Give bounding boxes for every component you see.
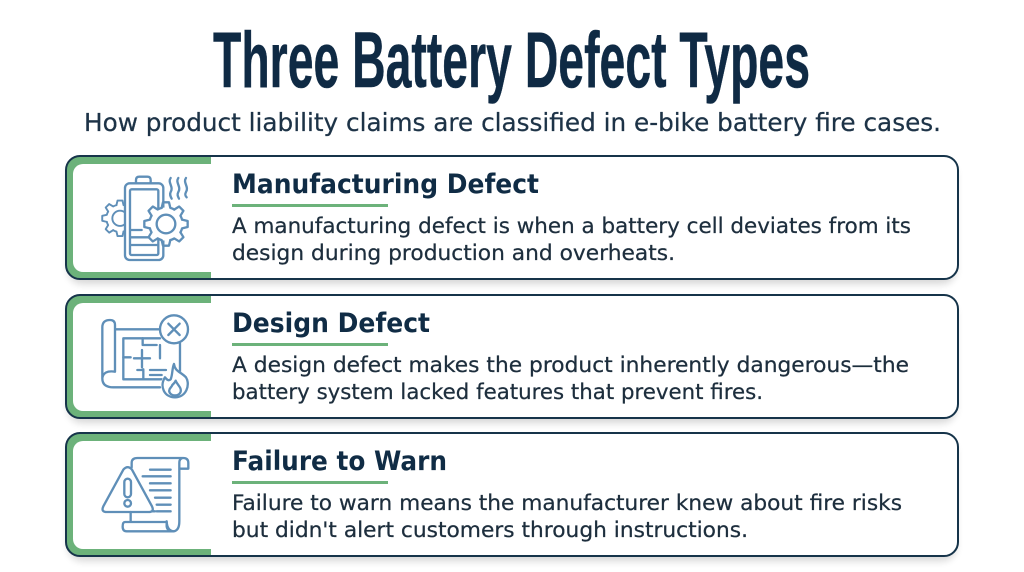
heading underline: [232, 343, 388, 346]
description: battery system lacked features that prevent fires.: [232, 380, 763, 405]
heading: Failure to Warn: [232, 446, 447, 477]
icon: warning triangle with document: [103, 458, 188, 531]
icon: blueprint with x mark and flame: [102, 315, 189, 398]
description: A manufacturing defect is when a battery cell deviates from its: [232, 214, 911, 239]
panel: manufacturing defect: [66, 156, 958, 284]
subtitle: How product liability claims are classified in e-bike battery fire cases.: [84, 108, 941, 137]
description: [232, 353, 909, 405]
heading: Manufacturing Defect: [232, 169, 539, 200]
heading: Design Defect: [232, 308, 430, 339]
description: A design defect makes the product inherently dangerous—the: [232, 353, 909, 378]
heading underline: [232, 481, 388, 484]
description: design during production and overheats.: [232, 241, 675, 266]
description: Failure to warn means the manufacturer knew about fire risks: [232, 491, 902, 516]
description: [232, 491, 902, 543]
panel: design defect: [66, 295, 958, 423]
heading underline: [232, 204, 388, 207]
icon: battery with gears and heat: [102, 177, 188, 260]
panel: failure to warn: [66, 433, 958, 561]
description: [232, 214, 911, 266]
description: but didn't alert customers through instructions.: [232, 518, 748, 543]
